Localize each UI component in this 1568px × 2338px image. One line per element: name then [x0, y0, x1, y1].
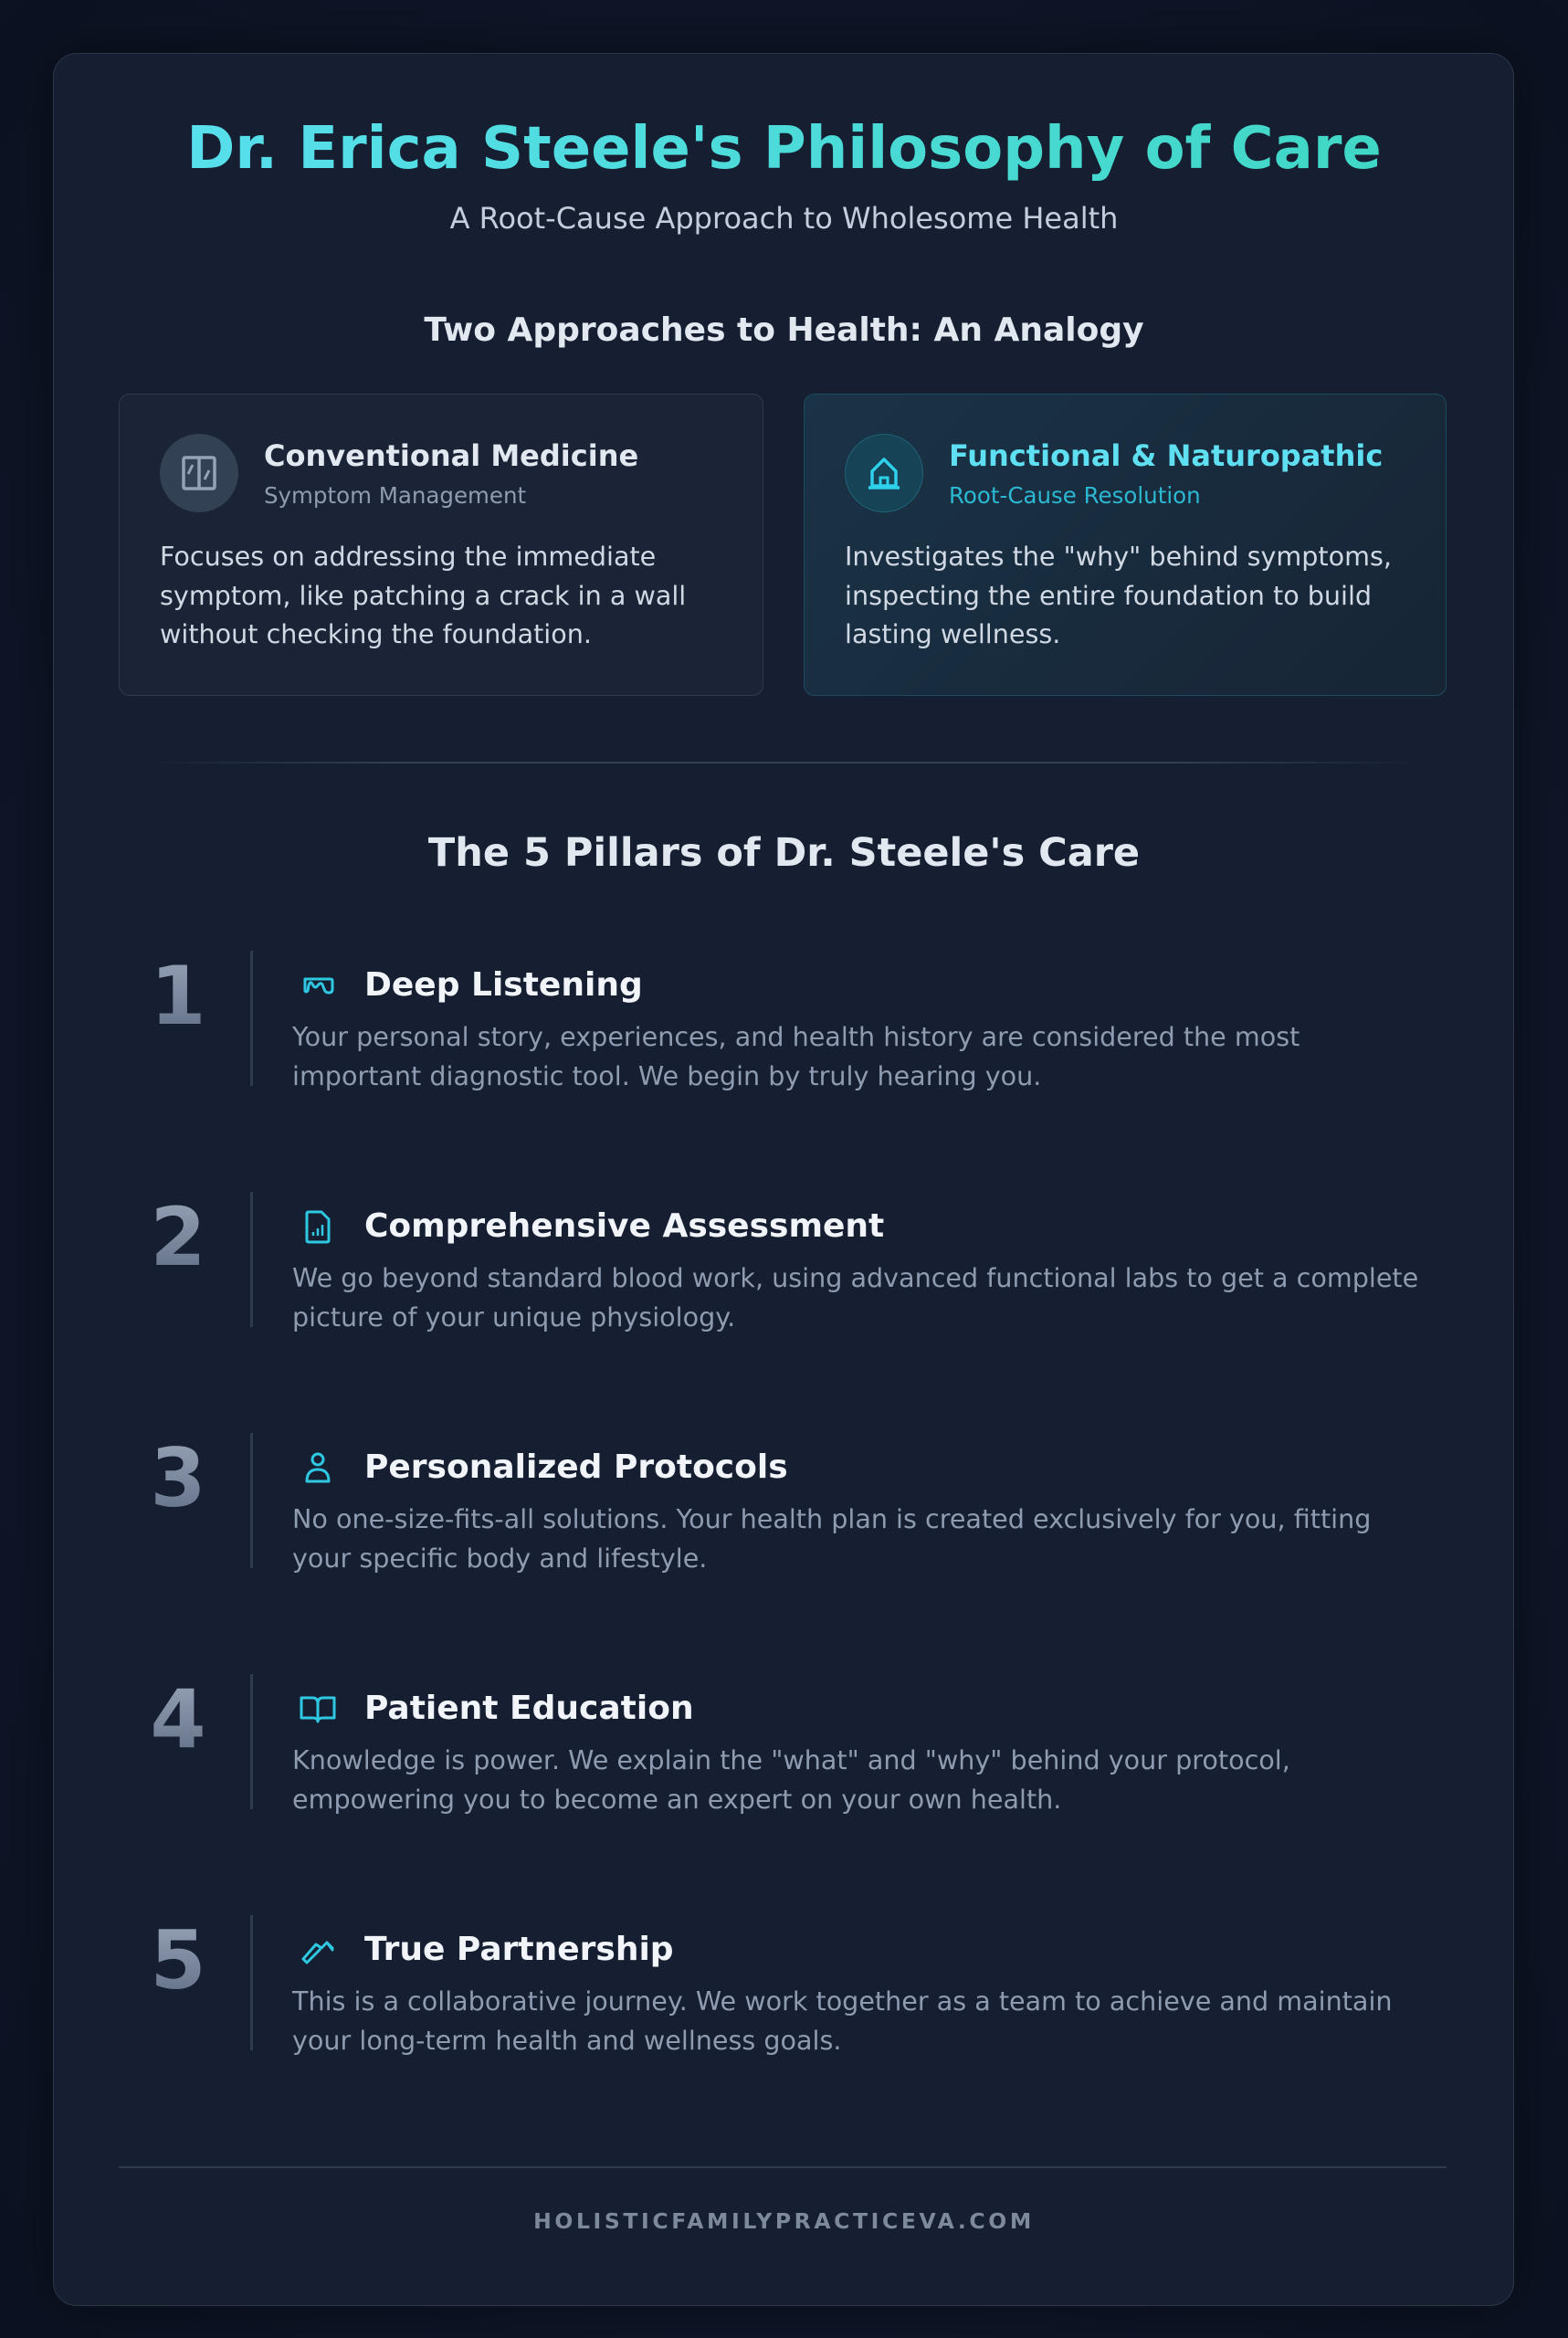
number 4: 4 — [150, 1672, 206, 1766]
pillar title: Patient Education — [364, 1690, 694, 1727]
icon: lab report — [305, 1211, 331, 1244]
card subtitle: Root-Cause Resolution — [949, 482, 1201, 509]
title: Dr. Erica Steele's Philosophy of Care — [186, 115, 1382, 183]
card title: Functional & Naturopathic — [949, 438, 1383, 473]
pillar description: No one-size-fits-all solutions. Your health plan is created exclusively for you, fitting your specific body and lifestyle. — [292, 1503, 1371, 1574]
icon: handshake — [301, 1941, 334, 1964]
pillar description: We go beyond standard blood work, using advanced functional labs to get a complete picture of your unique physiology. — [292, 1262, 1418, 1332]
icon: house — [845, 434, 923, 512]
card subtitle: Symptom Management — [264, 482, 526, 509]
pillar 1 — [150, 949, 1300, 1091]
heading: 5 pillars: The 5 Pillars of Dr. Steele's Care — [428, 830, 1140, 876]
icon: person — [305, 1452, 331, 1483]
card title: Conventional Medicine — [264, 438, 638, 473]
pillar title: True Partnership — [364, 1931, 674, 1968]
title — [0, 111, 1568, 187]
pillar title: Deep Listening — [364, 966, 643, 1004]
pillar 5 — [150, 1913, 1393, 2056]
panel: conventional medicine — [119, 394, 763, 696]
icon: cracked wall — [160, 434, 238, 512]
heading: two approaches: Two Approaches to Health: An Analogy — [424, 311, 1144, 349]
panel: functional & naturopathic — [804, 394, 1447, 696]
pillar title: Personalized Protocols — [364, 1448, 788, 1486]
icon: ear/listening — [303, 977, 334, 994]
card body: Focuses on addressing the immediate symptom, like patching a crack in a wall without checking the foundation. — [160, 541, 686, 649]
pillar description: Your personal story, experiences, and health history are considered the most important diagnostic tool. We begin by truly hearing you. — [292, 1021, 1300, 1091]
subtitle: A Root-Cause Approach to Wholesome Health — [450, 201, 1118, 236]
footer website: HOLISTICFAMILYPRACTICEVA.COM — [533, 2208, 1035, 2234]
number 2: 2 — [150, 1190, 206, 1284]
pillar title: Comprehensive Assessment — [364, 1207, 884, 1245]
pillar description: This is a collaborative journey. We work together as a team to achieve and maintain your long-term health and wellness goals. — [292, 1985, 1393, 2056]
pillar 4 — [150, 1672, 1290, 1815]
icon: open book — [300, 1697, 336, 1722]
card body: Investigates the "why" behind symptoms, inspecting the entire foundation to build lasting wellness. — [845, 541, 1392, 649]
number 1: 1 — [150, 949, 206, 1043]
number 5: 5 — [150, 1913, 206, 2007]
number 3: 3 — [150, 1431, 206, 1525]
pillar 2 — [150, 1190, 1418, 1332]
pillar description: Knowledge is power. We explain the "what" and "why" behind your protocol, empowering you to become an expert on your own health. — [292, 1744, 1290, 1815]
pillar 3 — [150, 1431, 1371, 1574]
